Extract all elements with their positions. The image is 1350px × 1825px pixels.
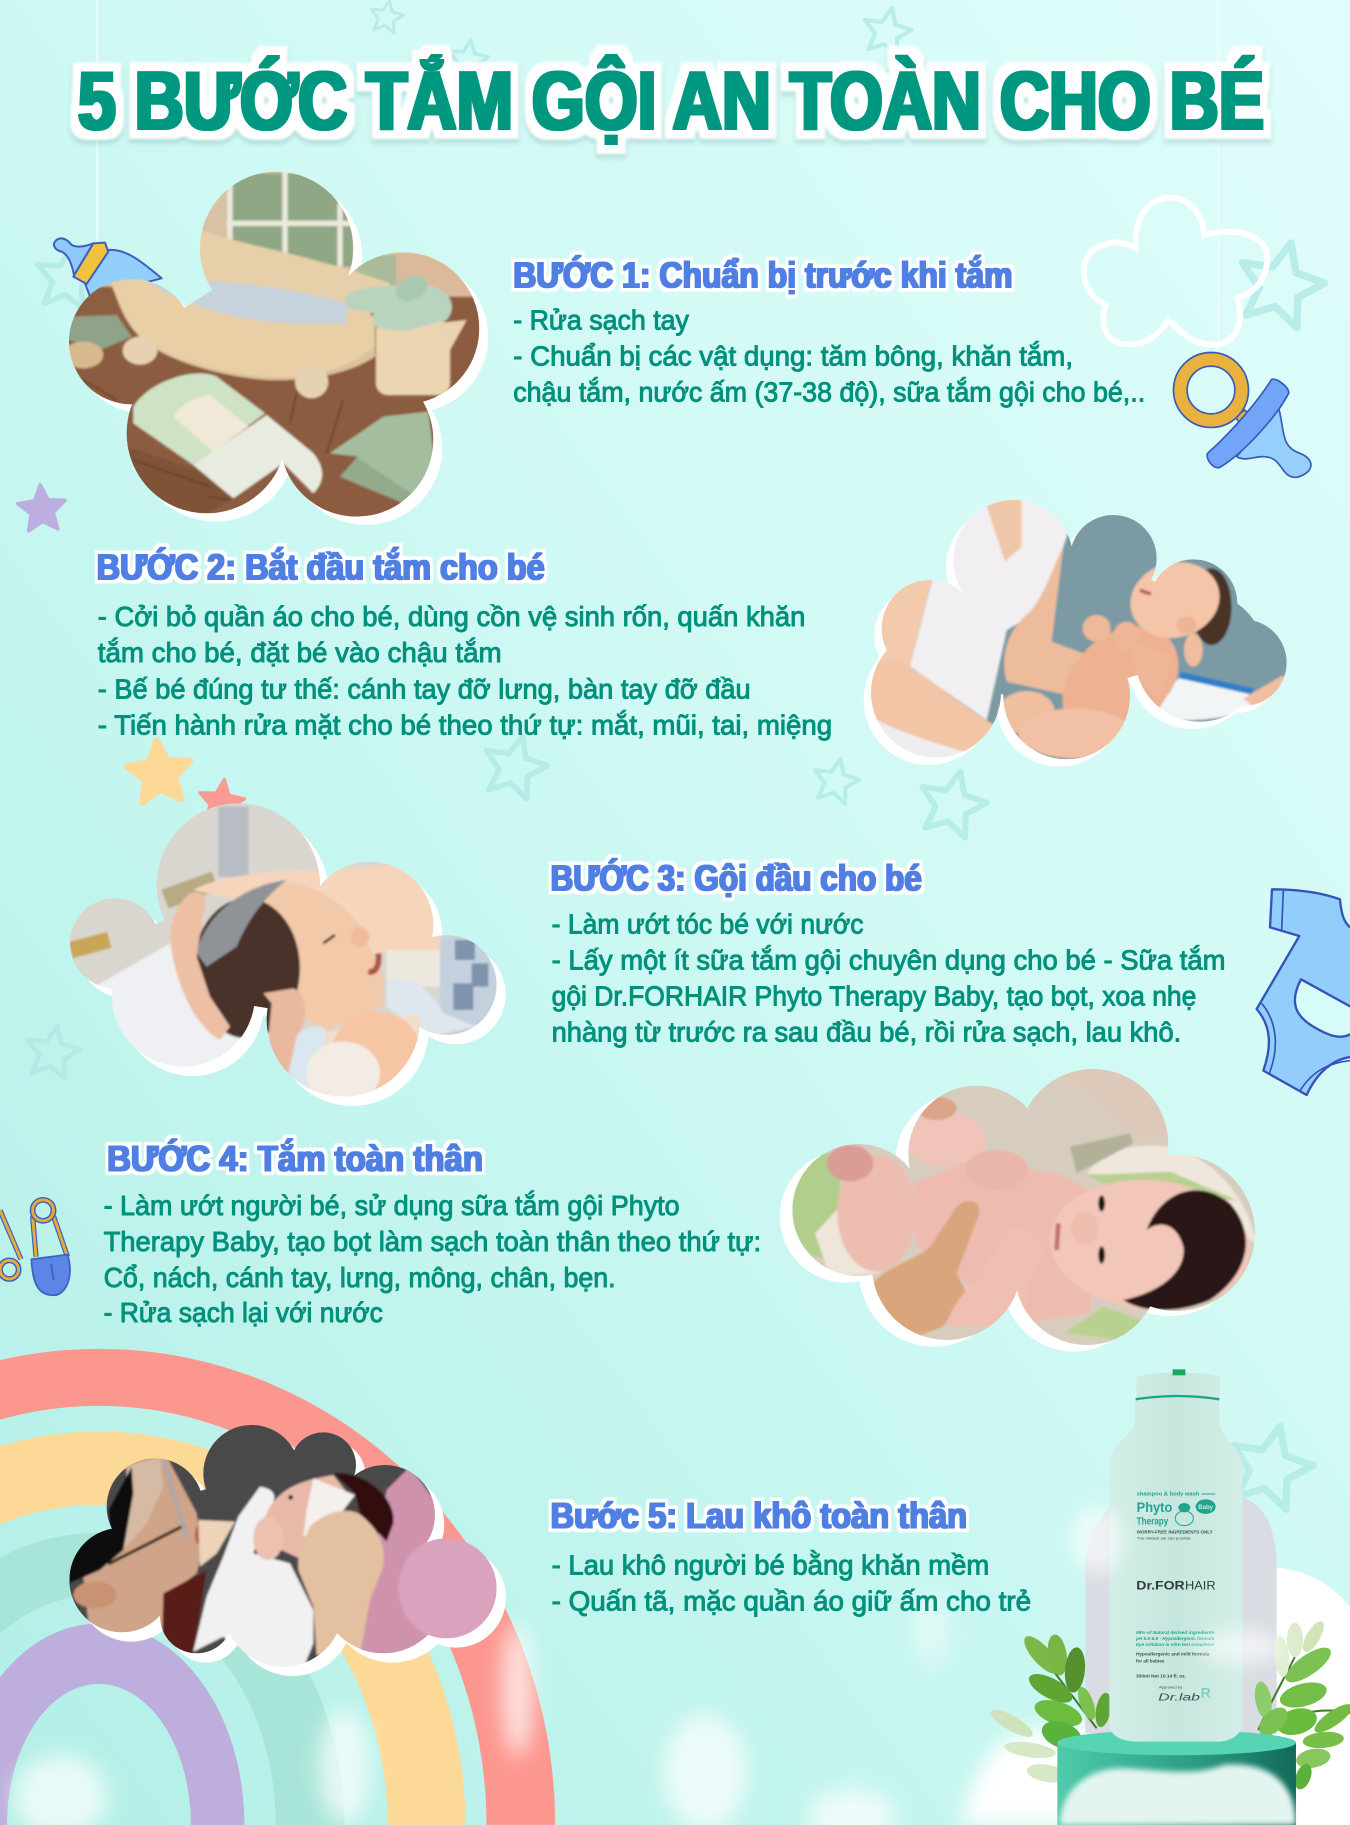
- heading and text: step 3: nhàng từ trước ra sau đầu bé, rồi rửa sạch, lau khô.: [552, 1017, 1181, 1048]
- heading and text: step 4: BƯỚC 4: Tắm toàn thân: [107, 1137, 483, 1179]
- icon: safety pins: [0, 1200, 70, 1295]
- heading and text: step 1: BƯỚC 1: Chuẩn bị trước khi tắm: [513, 253, 1012, 295]
- heading and text: step 3: gội Dr.FORHAIR Phyto Therapy Baby, tạo bọt, xoa nhẹ: [552, 981, 1196, 1012]
- heading and text: step 2: [97, 546, 832, 740]
- photo: washing baby hair: [70, 804, 506, 1106]
- rainbow: [0, 1349, 555, 1825]
- heading and text: step 4: - Làm ướt người bé, sử dụng sữa tắm gội Phyto: [104, 1190, 680, 1221]
- heading and text: step 1: - Chuẩn bị các vật dụng: tăm bông, khăn tắm,: [513, 340, 1073, 371]
- heading and text: step 5: Bước 5: Lau khô toàn thân: [550, 1495, 967, 1536]
- heading and text: step 3: - Lấy một ít sữa tắm gội chuyên dụng cho bé - Sữa tắm: [552, 944, 1225, 975]
- photo: drying baby with towel: [63, 1420, 506, 1676]
- heading and text: step 5: - Quấn tã, mặc quần áo giữ ấm cho trẻ: [552, 1586, 1031, 1617]
- icon: baby bottle: [54, 238, 162, 297]
- heading and text: step 3: [550, 856, 1225, 1048]
- heading and text: step 4: Cổ, nách, cánh tay, lưng, mông, chân, bẹn.: [104, 1262, 616, 1293]
- product: bottle label: Phyto: [1137, 1499, 1172, 1515]
- product: bottle label: [1135, 1492, 1216, 1704]
- heading and text: step 5: [550, 1495, 1031, 1617]
- icon: baby onesie: [1257, 889, 1350, 1095]
- heading and text: step 4: [104, 1137, 761, 1328]
- heading and text: step 3: - Làm ướt tóc bé với nước: [552, 908, 864, 939]
- product: bottle label: Eye irritation in vitro test completed: [1136, 1642, 1215, 1647]
- foreground fog: [1070, 1507, 1283, 1663]
- product: bottle label: R: [1201, 1684, 1211, 1700]
- photo: mother holding baby: [864, 500, 1286, 767]
- heading and text: step 1: chậu tắm, nước ấm (37-38 độ), sữa tắm gội cho bé,..: [513, 377, 1145, 408]
- product: bottle label: WORRY-FREE INGREDIENTS ONLY: [1137, 1529, 1213, 1534]
- product group: bottle on podium: [987, 1369, 1350, 1825]
- heading and text: step 2: - Bế bé đúng tư thế: cánh tay đỡ lưng, bàn tay đỡ đầu: [98, 673, 751, 704]
- product: bottle label: Dr.FOR: [1136, 1579, 1185, 1593]
- photo: baby in the bath: [780, 1069, 1255, 1352]
- product: bottle label: HAIR: [1185, 1579, 1216, 1593]
- heading and text: step 5: - Lau khô người bé bằng khăn mềm: [552, 1550, 989, 1581]
- product: bottle label: for all babies: [1136, 1658, 1165, 1663]
- product: bottle label: The mildest we can provide.: [1137, 1535, 1192, 1540]
- heading and text: step 3: BƯỚC 3: Gội đầu cho bé: [550, 856, 922, 898]
- heading and text: step 2: tắm cho bé, đặt bé vào chậu tắm: [98, 637, 502, 668]
- filled stars: [16, 483, 247, 825]
- product: bottle label: Hypoallergenic and mild formula: [1136, 1652, 1210, 1657]
- heading and text: step 2: BƯỚC 2: Bắt đầu tắm cho bé: [97, 546, 545, 588]
- product: bottle label: 95% of Natural derived ingredients: [1136, 1630, 1215, 1635]
- heading and text: step 1: - Rửa sạch tay: [513, 304, 689, 335]
- product: bottle label: Dr.lab: [1158, 1693, 1201, 1704]
- heading and text: step 4: Therapy Baby, tạo bọt làm sạch toàn thân theo thứ tự:: [104, 1226, 761, 1257]
- heading and text: step 2: - Cởi bỏ quần áo cho bé, dùng cồn vệ sinh rốn, quấn khăn: [98, 601, 805, 632]
- product: podium: [1057, 1730, 1296, 1825]
- product: bottle label: Baby: [1198, 1504, 1213, 1511]
- product: bottle label: shampoo & body wash: [1137, 1492, 1199, 1498]
- product: bottle body: [1109, 1373, 1243, 1742]
- big white cloud: [960, 1568, 1350, 1825]
- photo: baby bottle and bathtub: [54, 167, 490, 525]
- icon: pacifier: [1180, 359, 1311, 477]
- heading and text: step 2: - Tiến hành rửa mặt cho bé theo thứ tự: mắt, mũi, tai, miệng: [98, 709, 832, 740]
- heading and text: step 4: - Rửa sạch lại với nước: [104, 1297, 383, 1328]
- soft clouds: [14, 1590, 950, 1825]
- product: bottle label: 300ml Net 10.14 fl. oz.: [1136, 1673, 1186, 1678]
- product: translucent backdrop: [1085, 1497, 1277, 1733]
- product: bottle label: Therapy: [1137, 1516, 1169, 1527]
- product: bottle label: pH 5.5-6.5 · Hypoallergenic formula: [1135, 1636, 1215, 1641]
- product: bottle label: Approved by: [1159, 1686, 1183, 1690]
- icon: cloud outline: [1084, 198, 1267, 345]
- product: leaves: [987, 1618, 1350, 1792]
- heading and text: step 1: [513, 253, 1145, 408]
